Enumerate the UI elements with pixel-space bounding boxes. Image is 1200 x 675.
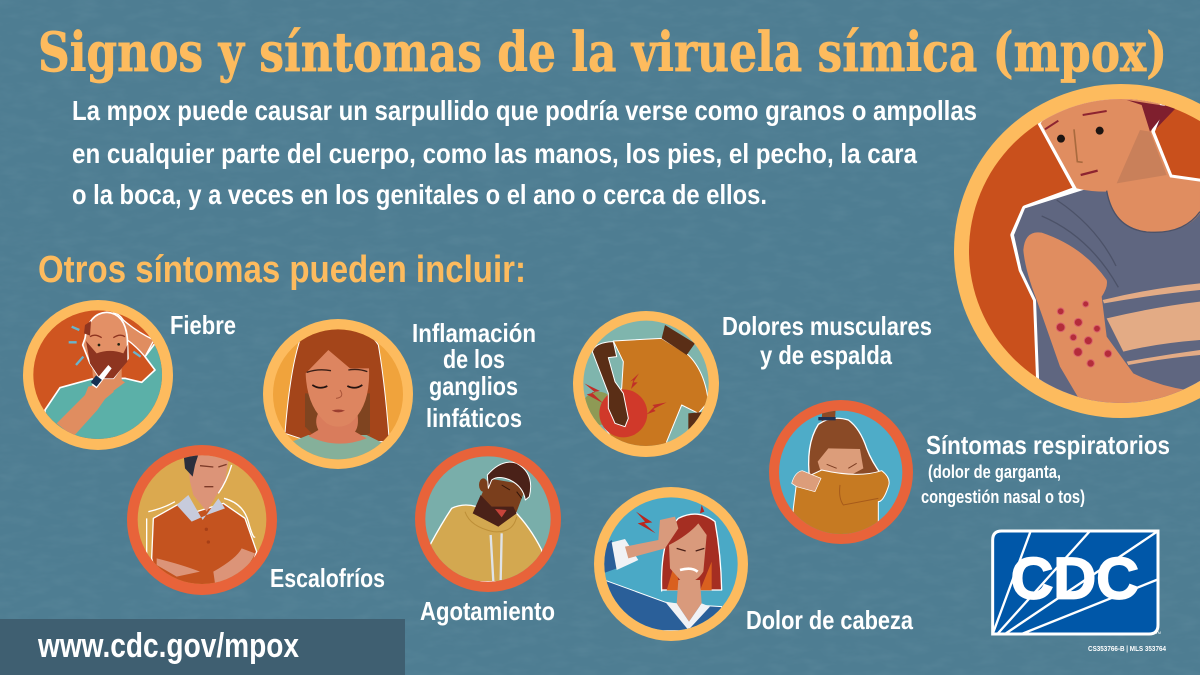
label: swollen lymph nodes: Inflamación xyxy=(412,318,536,348)
label: headache: Dolor de cabeza xyxy=(746,605,913,635)
footer URL bar: www.cdc.gov/mpox xyxy=(37,627,299,665)
label: fever: Fiebre xyxy=(170,310,236,340)
label: swollen lymph nodes: de los xyxy=(443,344,505,374)
icon: fever xyxy=(23,300,173,450)
intro paragraph: La mpox puede causar un sarpullido que podría verse como granos o ampollas xyxy=(72,95,977,126)
icon: respiratory symptoms xyxy=(769,400,913,544)
icon: headache xyxy=(594,487,748,641)
label: respiratory symptoms xyxy=(921,430,1170,507)
label: respiratory symptoms: congestión nasal o tos) xyxy=(921,487,1085,507)
icon: muscle and back pain xyxy=(573,311,719,457)
footer URL bar xyxy=(0,619,405,675)
CDC logo xyxy=(993,531,1161,635)
label: muscle and back pain: y de espalda xyxy=(760,340,892,370)
label: respiratory symptoms: (dolor de garganta, xyxy=(928,462,1061,482)
label: muscle and back pain: Dolores musculares xyxy=(722,311,932,341)
intro paragraph: o la boca, y a veces en los genitales o el ano o cerca de ellos. xyxy=(72,179,767,210)
icon: exhaustion xyxy=(415,446,561,592)
label: swollen lymph nodes: linfáticos xyxy=(426,403,522,433)
subheading: Otros síntomas pueden incluir: xyxy=(38,249,526,291)
icon: swollen lymph nodes xyxy=(263,319,413,469)
label: muscle and back pain xyxy=(722,311,932,370)
label: chills: Escalofríos xyxy=(270,563,385,593)
label: swollen lymph nodes: ganglios xyxy=(429,371,518,401)
label: swollen lymph nodes xyxy=(412,318,536,433)
icon: chills xyxy=(127,445,277,595)
intro paragraph xyxy=(72,95,977,210)
CDC logo: TM xyxy=(1156,631,1161,635)
intro paragraph: en cualquier parte del cuerpo, como las manos, los pies, el pecho, la cara xyxy=(72,138,917,169)
label: exhaustion: Agotamiento xyxy=(420,596,555,626)
CDC logo: CDC xyxy=(1011,547,1139,612)
icon: person with rash on arm xyxy=(954,84,1200,418)
publication code: CS353766-B | MLS 353764 xyxy=(1088,644,1167,653)
